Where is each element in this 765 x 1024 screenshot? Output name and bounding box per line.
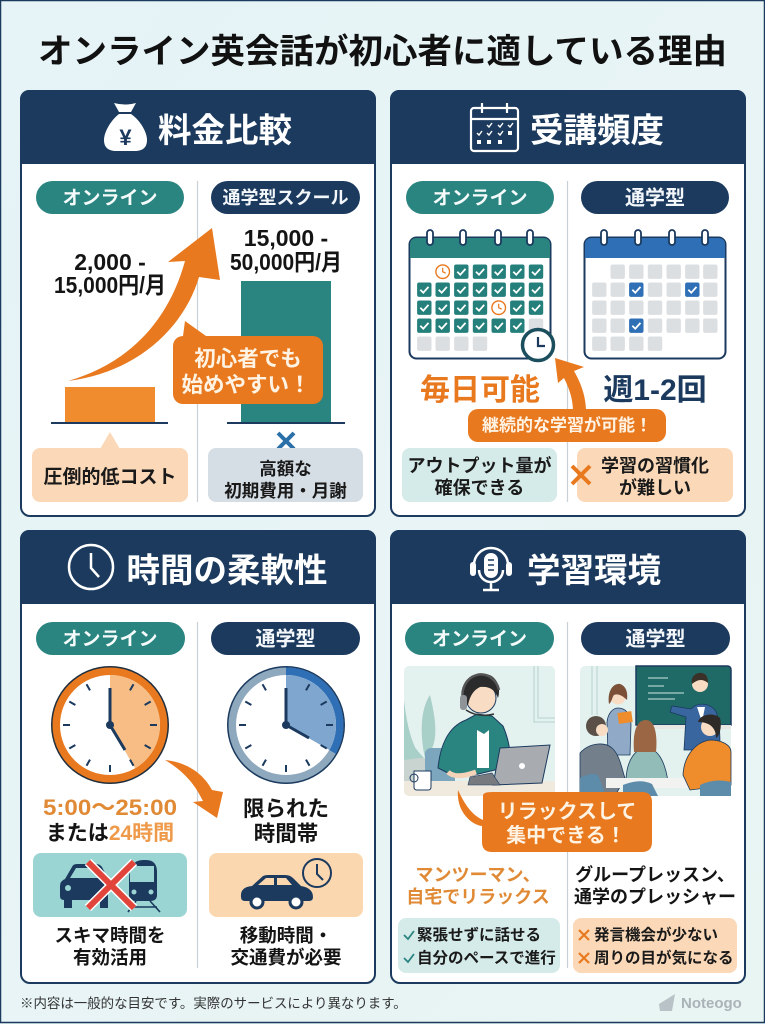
panel header: price [20, 90, 376, 164]
arrow: curved down [165, 760, 223, 818]
box: commute car [209, 853, 363, 917]
price online: 2,000 - [74, 249, 146, 275]
pill: online [405, 622, 554, 655]
box: habit: 学習の習慣化 [601, 455, 709, 476]
pill: school [581, 622, 730, 655]
icon: money bag [104, 103, 147, 151]
calendar: online daily [410, 230, 550, 358]
label: limited hours: 時間帯 [254, 822, 318, 846]
box: habit: が難しい [619, 477, 691, 498]
pill: online: オンライン [432, 188, 528, 209]
footnote: ※内容は一般的な目安です。実際のサービスにより異なります。 [20, 995, 407, 1011]
arrow: rising cost [68, 228, 220, 381]
price school: 15,000 - [244, 225, 328, 251]
box: habit [572, 448, 733, 502]
pill: school [211, 181, 360, 214]
panel: price comparison: 50,000円/月 [230, 249, 342, 275]
label: limited hours [243, 797, 329, 846]
box: high cost [208, 448, 363, 502]
callout: relax and focus [458, 790, 652, 852]
arrow: to clock [555, 358, 586, 412]
panel header: time [20, 530, 376, 604]
panel: price comparison: 15,000円/月 [54, 272, 166, 298]
callout: continuous learning: 継続的な学習が可能！ [482, 415, 652, 435]
text: one on one: 自宅でリラックス [406, 887, 550, 907]
box: output: アウトプット量が [408, 455, 552, 476]
box: output [402, 448, 557, 502]
pill: online: オンライン [62, 629, 158, 650]
pill: school: 通学型スクール [222, 187, 348, 208]
text: one on one: マンツーマン、 [416, 865, 540, 885]
bar chart: online cost [51, 387, 168, 424]
text: use spare time: スキマ時間を [54, 925, 166, 946]
bar chart: school cost [227, 281, 345, 424]
illustration: classroom [580, 666, 731, 796]
box: online benefits [398, 918, 560, 973]
pill: online: オンライン [62, 188, 158, 209]
box: high cost: 初期費用・月謝 [224, 481, 347, 501]
box: online benefits: 緊張せずに話せる [417, 926, 541, 944]
pill: online: オンライン [432, 629, 527, 650]
label: online hours: 5:00〜25:00 [43, 795, 177, 820]
icon: money bag: ¥ [119, 125, 132, 150]
box: low cost [32, 432, 188, 502]
text: commute cost: 移動時間・ [240, 925, 332, 946]
panel header: environment [390, 530, 746, 604]
icon: clock [69, 545, 113, 589]
callout: continuous learning [468, 409, 666, 442]
pill: online [36, 622, 185, 655]
text: use spare time: 有効活用 [73, 947, 147, 968]
box: low cost: 圧倒的低コスト [43, 466, 177, 488]
icon: train [128, 860, 160, 912]
pill: school [211, 622, 360, 655]
pill: online [36, 181, 184, 214]
label: online hours: または24時間 [46, 822, 174, 845]
panel: time flexibility [20, 530, 376, 983]
heading: time: 時間の柔軟性 [126, 553, 328, 590]
label: once or twice a week: 週1-2回 [603, 374, 707, 407]
pill: school: 通学型 [256, 628, 316, 650]
label: online hours [43, 795, 177, 845]
panel: frequency [390, 90, 746, 516]
label: limited hours: 限られた [243, 797, 329, 821]
panel: price comparison [20, 90, 376, 516]
text: commute cost [230, 925, 342, 968]
pill: online [406, 181, 554, 214]
text: commute cost: 交通費が必要 [230, 947, 342, 968]
text: use spare time [54, 925, 166, 968]
pill: school [581, 181, 729, 214]
illustration: online learner at home [404, 666, 555, 796]
calendar: school weekly [584, 230, 726, 358]
box: school drawbacks: 発言機会が少ない [594, 925, 718, 944]
box: output: 確保できる [435, 478, 524, 498]
icon: car side [241, 875, 313, 908]
box: high cost: 高額な [259, 459, 312, 479]
callout: easy to start [173, 321, 323, 404]
logo: Noteogo: Noteogo [681, 995, 742, 1012]
icon: headset microphone [470, 548, 512, 590]
icon: x mark [572, 466, 590, 484]
text: group lesson: 通学のプレッシャー [574, 886, 736, 907]
box: school drawbacks [573, 918, 737, 973]
heading: environment: 学習環境 [527, 553, 661, 590]
panel header: frequency [390, 90, 746, 164]
pill: school: 通学型 [625, 186, 685, 210]
panel: learning environment [390, 530, 746, 983]
callout: easy to start: 初心者でも [194, 347, 302, 371]
callout: relax and focus: 集中できる！ [506, 824, 626, 847]
icon: x mark [278, 433, 294, 449]
text: group lesson [574, 864, 736, 907]
clock: online hours [51, 666, 169, 784]
icon: clock [303, 859, 331, 887]
clock: school hours [227, 666, 345, 784]
heading: price: 料金比較 [158, 113, 292, 150]
heading: frequency: 受講頻度 [530, 113, 664, 150]
icon: clock badge [522, 330, 554, 360]
text: group lesson: グループレッスン、 [575, 864, 735, 885]
icon: calendar [471, 103, 518, 151]
title: オンライン英会話が初心者に適している理由 [38, 32, 727, 71]
box: online benefits: 自分のペースで進行 [417, 949, 556, 967]
pill: school: 通学型 [626, 628, 686, 650]
box: school drawbacks: 周りの目が気になる [594, 948, 734, 967]
logo: Noteogo [659, 994, 742, 1012]
box: no commute [33, 853, 187, 917]
icon: red cross [88, 862, 134, 908]
callout: easy to start: 始めやすい！ [181, 373, 311, 397]
icon: car [60, 864, 108, 908]
text: one on one [406, 865, 550, 907]
callout: relax and focus: リラックスして [498, 800, 636, 823]
label: daily possible: 毎日可能 [420, 374, 540, 407]
